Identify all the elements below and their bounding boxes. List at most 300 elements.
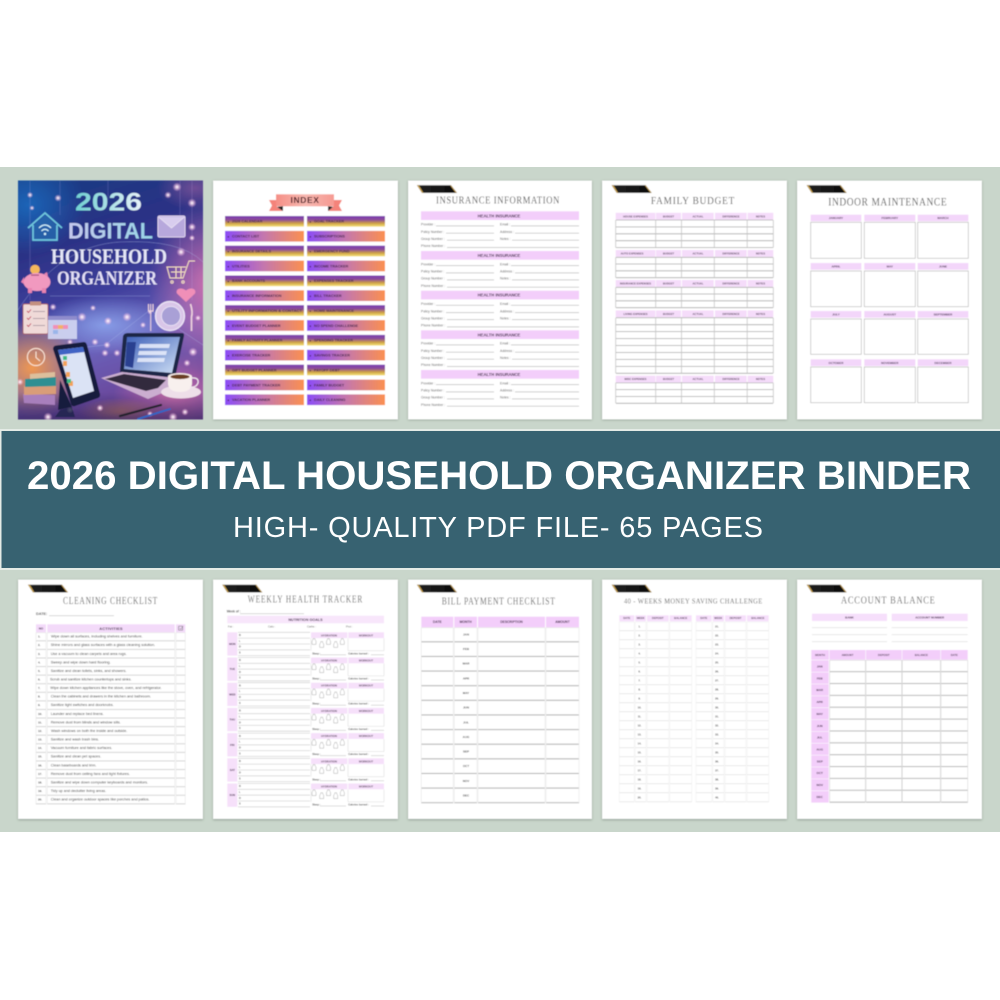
tracker day: sunday <box>227 784 384 807</box>
bill payment title: BILL PAYMENT CHECKLIST <box>442 597 556 608</box>
index bars left column: DEBT PAYMENT TRACKER <box>232 383 281 387</box>
bill months: APR <box>463 676 470 680</box>
checklist table header: ACTIVITIES <box>99 626 123 631</box>
account table cells <box>830 660 968 803</box>
icon: calendar <box>48 316 77 339</box>
tracker day: tuesday: Calories burned : <box>348 678 369 680</box>
tracker day: monday: D <box>239 646 241 649</box>
insurance block 2: Phone Number : <box>421 284 445 288</box>
checklist activities: Clean and organize outdoor spaces like porches and patios. <box>51 798 150 802</box>
week numbers 1 to 20: 16. <box>638 759 642 763</box>
icon: clipboard checklist <box>23 302 48 334</box>
week numbers 1 to 20: 2. <box>638 633 641 637</box>
tracker day: sunday: Calories burned : <box>348 804 369 806</box>
week numbers 21 to 40: 23. <box>715 642 719 646</box>
icon: plate and cutlery <box>148 302 192 331</box>
tracker day: saturday: L <box>239 766 241 769</box>
week numbers 1 to 20: 9. <box>638 696 641 700</box>
month labels: JULY <box>832 312 840 316</box>
account month column: SEP <box>817 759 823 763</box>
icon: laptop <box>101 333 184 399</box>
house expenses header: HOUSE EXPENSES <box>623 214 648 218</box>
week numbers 1 to 20: 11. <box>638 714 642 718</box>
week numbers 1 to 20: 17. <box>638 768 642 772</box>
house expenses header: ACTUAL <box>692 214 704 218</box>
insurance expenses header <box>616 280 773 287</box>
week numbers 1 to 20: 5. <box>638 660 641 664</box>
insurance block 3: Address : <box>500 309 514 313</box>
insurance block 1: Address : <box>500 230 514 234</box>
tracker day: wednesday: WORKOUT <box>359 684 373 688</box>
tracker day: wednesday: HYDRATION <box>321 684 337 688</box>
auto expenses header: ACTUAL <box>692 252 704 256</box>
month labels <box>829 216 953 365</box>
insurance block 4: HEALTH INSURANCE <box>478 332 521 337</box>
checklist table header <box>36 624 185 632</box>
living expenses header: BUDGET <box>663 312 675 316</box>
bill table header: AMOUNT <box>555 620 570 624</box>
bill months: SEP <box>463 750 469 754</box>
checklist numbers: 14. <box>38 746 42 750</box>
tracker day: tuesday: TUE <box>230 667 235 671</box>
insurance block 3: Email : <box>500 302 510 306</box>
week numbers 21 to 40: 40. <box>715 795 719 799</box>
insurance block 2: Group Number : <box>421 277 445 281</box>
index bars left column: EVENT BUDGET PLANNER <box>232 324 281 328</box>
checklist numbers: 1. <box>38 635 41 639</box>
panel: bill payment checklist page <box>408 580 592 819</box>
banner headline: 2026 DIGITAL HOUSEHOLD ORGANIZER BINDER <box>27 454 971 498</box>
month labels: MARCH <box>937 216 949 220</box>
checklist activities: Wash windows on both the inside and outside. <box>51 729 127 733</box>
checklist numbers: 15. <box>38 755 42 759</box>
tracker day: sunday: L <box>239 791 241 794</box>
tracker day: wednesday: S <box>239 702 241 705</box>
index bars right column: NO SPEND CHALLENGE <box>314 324 358 328</box>
week numbers 1 to 20: 3. <box>638 642 641 646</box>
tracker day: thursday: B <box>239 710 241 713</box>
auto expenses header <box>616 250 773 257</box>
auto expenses header: AUTO EXPENSES <box>621 252 644 256</box>
insurance block 1: Group Number : <box>421 237 445 241</box>
tracker day: tuesday: L <box>239 665 241 668</box>
page corner ribbon <box>417 585 457 592</box>
index bars left column: FAMILY ACTIVITY PLANNER <box>232 339 283 343</box>
insurance block 1: Phone Number : <box>421 244 445 248</box>
week numbers 21 to 40: 25. <box>715 660 719 664</box>
account table header: BALANCE <box>915 653 928 657</box>
account month column: AUG <box>816 748 824 752</box>
icon: shopping cart <box>167 261 195 283</box>
tracker day: saturday: SAT <box>230 768 235 772</box>
account month column: JUL <box>817 736 823 740</box>
budget grid lines <box>616 220 773 403</box>
page corner ribbon <box>28 585 68 592</box>
insurance expenses header: ACTUAL <box>692 282 704 286</box>
bill months: AUG <box>463 735 470 739</box>
tracker day: saturday: HYDRATION <box>321 759 337 763</box>
insurance block 5: Email : <box>500 381 510 385</box>
account table header <box>811 650 968 660</box>
tracker day: friday: L <box>239 741 241 744</box>
checklist activities: Sweep and wipe down hard flooring. <box>51 660 111 664</box>
checklist activities: Clean baseboards and trim. <box>51 763 96 767</box>
index bars left column: INSURANCE INFORMATION <box>232 294 282 298</box>
index bars right column: PAYOFF DEBT <box>314 368 341 372</box>
savings table headers <box>619 615 769 621</box>
week numbers 21 to 40: 38. <box>715 777 719 781</box>
tracker day: wednesday: Calories burned : <box>348 703 369 706</box>
tracker day: sunday: D <box>239 797 241 800</box>
insurance block 1 <box>421 211 579 248</box>
account table header: AMOUNT <box>842 653 854 657</box>
tracker day: monday: B <box>239 634 241 637</box>
bank and account number fields: ACCOUNT NUMBER <box>915 616 945 620</box>
index bars right column: BILL TRACKER <box>314 294 342 298</box>
checklist activities: Remove dust from blinds and window sills. <box>51 720 121 724</box>
tracker day: tuesday: Sleep : <box>312 678 321 680</box>
savings table headers: WEEK <box>637 616 645 620</box>
savings table headers: DATE <box>623 616 631 620</box>
checklist numbers: 7. <box>38 686 41 690</box>
panel: weekly health tracker page <box>213 580 398 819</box>
page shadows <box>18 181 982 820</box>
nutrition goals bar: Prot : <box>346 624 353 628</box>
index bars left column: 2026 CALENDAR <box>232 220 263 224</box>
index bars right column: SUBSCRIPTIONS <box>314 235 345 239</box>
background sage band <box>0 167 1000 832</box>
tracker day: monday: L <box>239 640 241 643</box>
title banner <box>0 429 1000 570</box>
tracker day: tuesday: B <box>239 659 241 662</box>
week numbers 21 to 40: 30. <box>715 705 719 709</box>
house expenses header: BUDGET <box>663 214 675 218</box>
account month column <box>811 660 829 803</box>
auto expenses header: NOTES <box>756 252 765 256</box>
tracker day: thursday: D <box>239 721 241 724</box>
misc expenses header: NOTES <box>756 377 765 381</box>
tracker day: thursday: HYDRATION <box>321 709 337 713</box>
index bars right column: GOAL TRACKER <box>314 220 344 224</box>
checklist numbers <box>38 635 42 802</box>
date line <box>36 612 114 616</box>
index bars left column: UTILITIES <box>232 264 250 268</box>
month labels: NOVEMBER <box>881 361 899 365</box>
insurance block 5 <box>421 370 579 407</box>
family budget title: FAMILY BUDGET <box>651 195 735 207</box>
insurance block 5: Policy Number : <box>421 389 444 393</box>
checklist numbers: 10. <box>38 712 42 716</box>
page corner ribbon <box>417 185 457 193</box>
week numbers 21 to 40: 22. <box>715 633 719 637</box>
bill months: FEB <box>463 647 470 651</box>
misc expenses header: DIFFERENCE <box>722 377 740 381</box>
savings table cells <box>619 622 769 802</box>
living expenses header: ACTUAL <box>692 312 704 316</box>
checklist activities: Sanitize and wash trash bins. <box>51 738 99 742</box>
index bars right column: INCOME TRACKER <box>314 264 349 268</box>
tracker day: saturday: Calories burned : <box>348 778 369 781</box>
account month column: DEC <box>817 795 824 799</box>
account month column: FEB <box>817 676 824 680</box>
checklist numbers: 13. <box>38 738 42 742</box>
icon: heart <box>177 288 195 302</box>
insurance block 5: HEALTH INSURANCE <box>478 372 521 377</box>
index bars left column: UTILITY INFORMATION & CONTACT <box>232 309 303 313</box>
index bars left column: EXERCISE TRACKER <box>232 354 271 358</box>
savings table headers: DEPOSIT <box>652 616 664 620</box>
cover heading: 2026 <box>75 188 142 216</box>
insurance block 2: Address : <box>500 270 514 274</box>
account balance title: ACCOUNT BALANCE <box>841 595 936 606</box>
insurance block 1: Provider : <box>421 223 435 227</box>
week numbers 1 to 20: 1. <box>638 624 641 628</box>
checklist activities: Launder and replace bed linens. <box>51 712 104 716</box>
icon: stack of books <box>23 372 56 405</box>
insurance expenses header: NOTES <box>756 282 765 286</box>
insurance block 2: Email : <box>500 262 510 266</box>
week numbers 21 to 40: 39. <box>715 786 719 790</box>
tracker day: saturday: WORKOUT <box>359 759 373 763</box>
tracker day: monday: WORKOUT <box>359 633 373 637</box>
bill months: JUN <box>463 706 469 710</box>
insurance block 2 <box>421 251 579 288</box>
month labels: OCTOBER <box>829 361 844 365</box>
insurance block 5: Address : <box>500 389 514 393</box>
week numbers 1 to 20: 8. <box>638 687 641 691</box>
tracker day: sunday: S <box>239 803 241 806</box>
insurance block 3: Provider : <box>421 302 435 306</box>
tracker day: monday: S <box>239 651 241 654</box>
page corner ribbon <box>612 585 652 592</box>
nutrition goals bar: NUTRITION GOALS <box>288 618 323 622</box>
index ribbon heading <box>269 194 342 211</box>
index bars right column: EMERGENCY FUND <box>314 249 350 253</box>
tracker day: friday: B <box>239 735 241 738</box>
tracker day: thursday <box>227 708 384 731</box>
insurance block 3: Notes : <box>500 316 511 320</box>
month boxes <box>811 222 968 403</box>
account month column: APR <box>817 700 824 704</box>
savings table headers: WEEK <box>714 616 722 620</box>
insurance block 2: Provider : <box>421 262 435 266</box>
house expenses header: NOTES <box>756 214 765 218</box>
week numbers 1 to 20 <box>638 624 642 799</box>
tracker day: monday: Calories burned : <box>348 652 369 655</box>
living expenses header <box>616 310 773 317</box>
misc expenses header: MISC EXPENSES <box>625 377 647 381</box>
savings table headers: DEPOSIT <box>730 616 742 620</box>
bill table header: MONTH <box>460 620 472 624</box>
month labels: DECEMBER <box>934 361 952 365</box>
insurance block 5: Phone Number : <box>421 403 445 407</box>
house expenses header <box>616 213 773 220</box>
insurance block 3: Policy Number : <box>421 309 444 313</box>
checklist cells <box>36 633 185 804</box>
tracker day: wednesday: WED <box>229 692 235 696</box>
index bars right column: SAVINGS TRACKER <box>314 354 350 358</box>
cover heading: HOUSEHOLD <box>51 244 167 268</box>
savings table headers: BALANCE <box>751 616 765 620</box>
insurance block 1: Policy Number : <box>421 230 444 234</box>
checklist numbers: 12. <box>38 729 42 733</box>
bill months: MAY <box>463 691 469 695</box>
account table header: DATE <box>951 653 958 657</box>
icon: coffee cup <box>161 373 201 398</box>
checklist numbers: 9. <box>38 703 41 707</box>
misc expenses header: BUDGET <box>663 377 675 381</box>
index bars right column <box>307 216 385 405</box>
week numbers 21 to 40: 32. <box>715 723 719 727</box>
checklist activities: Remove dust from ceiling fans and light fixtures. <box>51 772 130 776</box>
week numbers 1 to 20: 6. <box>638 669 641 673</box>
tracker title: WEEKLY HEALTH TRACKER <box>248 595 363 606</box>
insurance expenses header: INSURANCE EXPENSES <box>620 282 651 286</box>
week numbers 1 to 20: 4. <box>638 651 641 655</box>
indoor maintenance title: INDOOR MAINTENANCE <box>828 195 947 209</box>
week numbers 21 to 40: 29. <box>715 696 719 700</box>
page corner ribbon <box>807 185 847 193</box>
checklist numbers: 5. <box>38 669 41 673</box>
icon: clock <box>27 348 45 366</box>
account month column: MAY <box>816 712 823 716</box>
tracker day: friday: WORKOUT <box>359 734 373 738</box>
week of line: Week of : <box>227 609 241 613</box>
account month column: JUN <box>817 724 823 728</box>
insurance block 3: Group Number : <box>421 316 445 320</box>
week numbers 21 to 40 <box>715 624 719 799</box>
tracker day: wednesday: Sleep : <box>312 703 321 706</box>
icon: piggy bank <box>21 265 50 293</box>
tracker day: thursday: Sleep : <box>312 728 321 731</box>
index bars right column: DAILY CLEANING <box>314 398 346 402</box>
cover heading <box>51 188 167 290</box>
tracker day: friday: HYDRATION <box>321 734 337 738</box>
month labels: SEPTEMBER <box>934 312 953 316</box>
panel: cleaning checklist page <box>18 580 203 819</box>
checklist activities: Clean the cabinets and drawers in the kitchen and bathroom. <box>51 695 151 699</box>
account month column: MAR <box>816 688 824 692</box>
checklist numbers: 11. <box>38 720 42 724</box>
index bars left column: GIFT BUDGET PLANNER <box>232 368 277 372</box>
tracker day: friday <box>227 733 384 756</box>
checklist table header: NO <box>39 627 44 631</box>
bill months: NOV <box>463 779 469 783</box>
week numbers 21 to 40: 37. <box>715 768 719 772</box>
savings table headers: DATE <box>700 616 708 620</box>
insurance block 4 <box>421 330 579 367</box>
index bars left column: CONTACT LIST <box>232 235 260 239</box>
account month column: JAN <box>817 664 823 668</box>
house expenses header: DIFFERENCE <box>722 214 740 218</box>
cover heading: ORGANIZER <box>57 268 157 290</box>
month labels: JANUARY <box>829 216 843 220</box>
insurance block 4: Phone Number : <box>421 363 445 367</box>
tracker day: friday: D <box>239 746 241 749</box>
insurance expenses header: DIFFERENCE <box>722 282 740 286</box>
account month column: NOV <box>816 783 823 787</box>
banner subtitle: HIGH- QUALITY PDF FILE- 65 PAGES <box>233 512 763 544</box>
week numbers 1 to 20: 7. <box>638 678 641 682</box>
week numbers 21 to 40: 35. <box>715 750 719 754</box>
account table header: MONTH <box>815 653 825 657</box>
insurance block 5: Notes : <box>500 396 511 400</box>
tracker day: friday: S <box>239 752 241 755</box>
tracker day: tuesday: D <box>239 671 241 674</box>
bill months <box>463 632 470 797</box>
week numbers 21 to 40: 28. <box>715 687 719 691</box>
tracker day: saturday <box>227 758 384 782</box>
checklist numbers: 6. <box>38 678 41 682</box>
index bars left column: INSURANCE DETAILS <box>232 249 272 253</box>
tracker day: thursday: Calories burned : <box>348 728 369 731</box>
panel: indoor maintenance page <box>797 180 982 420</box>
week numbers 21 to 40: 36. <box>715 759 719 763</box>
checklist activities: Wipe down kitchen appliances like the stove, oven, and refrigerator. <box>50 686 162 690</box>
misc expenses header: ACTUAL <box>692 377 704 381</box>
infographic canvas <box>0 167 1000 832</box>
nutrition goals bar: Fat : <box>228 624 234 628</box>
cover glowing lights <box>16 182 201 422</box>
insurance block 3 <box>421 291 579 328</box>
insurance block 4: Policy Number : <box>421 349 444 353</box>
month labels: APRIL <box>832 264 841 268</box>
week numbers 21 to 40: 24. <box>715 651 719 655</box>
tracker day: thursday: S <box>239 727 241 730</box>
checklist activities: Wipe down all surfaces, including shelves and furniture. <box>51 635 143 639</box>
week numbers 21 to 40: 33. <box>715 732 719 736</box>
checklist numbers: 8. <box>38 695 41 699</box>
month headers <box>811 215 968 366</box>
tracker day: thursday: L <box>239 715 241 718</box>
tracker day: friday: Sleep : <box>312 753 321 756</box>
nutrition goals bar: Calo : <box>268 624 276 628</box>
panel: account balance page <box>797 580 982 819</box>
tracker day: saturday: Sleep : <box>312 778 321 781</box>
checklist activities: Tidy up and declutter living areas. <box>51 789 106 793</box>
index ribbon heading: INDEX <box>291 195 319 205</box>
panel: 40 weeks money saving challenge page <box>602 580 787 819</box>
icon: smart home <box>28 213 62 240</box>
tracker day: sunday: HYDRATION <box>321 784 337 788</box>
week numbers 21 to 40: 26. <box>715 669 719 673</box>
checklist activities: Scrub and sanitize kitchen countertops and sinks. <box>50 678 132 682</box>
auto expenses header: DIFFERENCE <box>722 252 740 256</box>
month labels: AUGUST <box>883 312 896 316</box>
living expenses header: NOTES <box>756 312 765 316</box>
week numbers 1 to 20: 14. <box>638 741 642 745</box>
tracker day: tuesday <box>227 658 384 681</box>
checklist numbers: 18. <box>38 780 42 784</box>
insurance block 4: Email : <box>500 342 510 346</box>
insurance block 1: Email : <box>500 223 510 227</box>
bill months: JAN <box>463 632 469 636</box>
week numbers 1 to 20: 12. <box>638 723 642 727</box>
month labels: MAY <box>887 264 893 268</box>
week numbers 21 to 40: 34. <box>715 741 719 745</box>
week numbers 1 to 20: 19. <box>638 786 642 790</box>
tracker day: wednesday <box>227 683 384 706</box>
misc expenses header <box>616 376 773 382</box>
cover heading: DIGITAL <box>68 218 153 244</box>
insurance title: INSURANCE INFORMATION <box>436 194 560 206</box>
index bars right column: SPENDING TRACKER <box>314 339 353 343</box>
tracker day: sunday: SUN <box>229 793 235 797</box>
insurance block 5: Group Number : <box>421 396 445 400</box>
savings table headers: BALANCE <box>674 616 687 620</box>
panel: insurance information page <box>408 180 592 420</box>
checklist activities <box>50 635 162 802</box>
